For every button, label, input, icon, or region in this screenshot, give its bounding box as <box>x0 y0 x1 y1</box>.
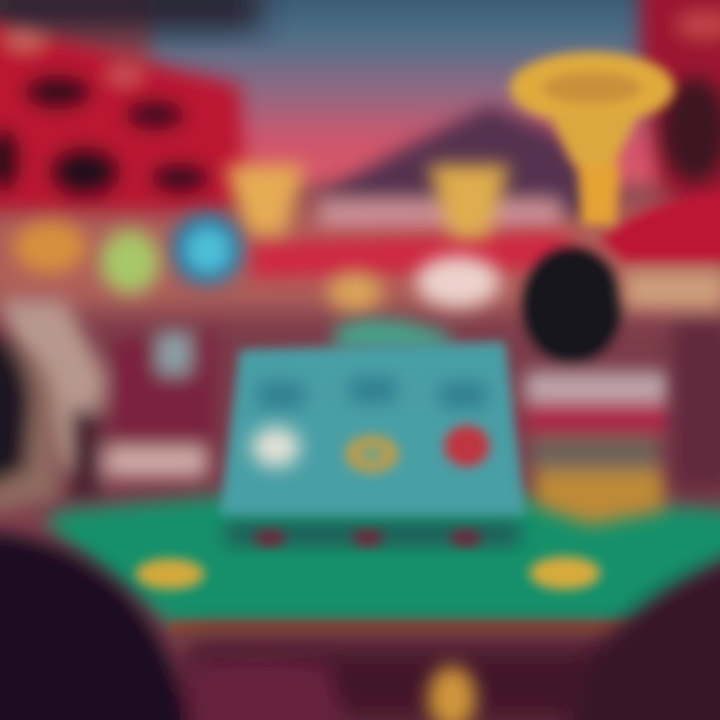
chandelier left <box>225 165 305 235</box>
gold chips on table <box>136 557 600 589</box>
red banner right <box>600 190 720 262</box>
green table <box>45 495 720 720</box>
reel icon: red symbol <box>444 425 490 467</box>
reel icon: top labels <box>258 378 486 407</box>
yellow lamp middle <box>327 272 383 312</box>
foreground silhouette left <box>0 530 350 720</box>
blue orb light <box>171 213 243 285</box>
foreground gold chip <box>428 666 476 720</box>
red patterned wall left <box>0 20 245 210</box>
right stacks of chips <box>525 372 670 525</box>
white sign <box>416 256 500 308</box>
chandelier centre <box>428 165 510 238</box>
person head left <box>0 335 60 515</box>
red wall top right <box>640 0 720 240</box>
large gold chandelier <box>510 52 674 225</box>
mountain silhouette <box>320 105 600 228</box>
right edge person <box>625 272 720 490</box>
red band centre <box>250 232 600 278</box>
dark silhouette person <box>522 247 622 363</box>
foreground silhouette right <box>565 555 720 720</box>
green orb light <box>100 230 160 294</box>
orange lamp left <box>14 221 86 273</box>
slot machine screen <box>220 319 526 515</box>
crowd left <box>0 300 215 500</box>
reel icon: white symbol <box>252 427 300 467</box>
reel icon: gold symbol <box>345 435 399 473</box>
table dark stripe <box>225 522 520 547</box>
